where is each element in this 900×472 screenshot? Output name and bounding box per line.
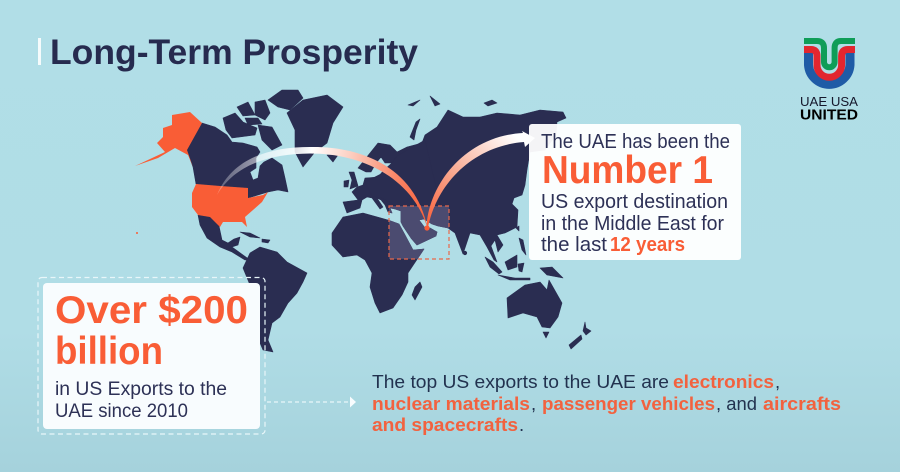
Iceland xyxy=(327,155,338,162)
Greenland xyxy=(287,95,343,167)
text block: top US exports: nuclear materials xyxy=(372,393,530,414)
Arctic Russia islands xyxy=(408,96,497,140)
arc: UAE to callout with arrow xyxy=(426,131,535,228)
text block: top US exports: . xyxy=(519,414,524,435)
Canada xyxy=(187,123,288,198)
callout: over $200 billion: in US Exports to the xyxy=(55,379,227,400)
British Isles xyxy=(344,172,358,189)
logo: UAE USA xyxy=(800,94,858,109)
text block: top US exports: , xyxy=(775,371,780,392)
text block: top US exports: passenger vehicles xyxy=(542,393,715,414)
South America xyxy=(243,247,307,352)
highlighted Middle East box xyxy=(388,205,450,260)
text block: top US exports: and spacecrafts xyxy=(372,414,518,435)
text block: top US exports: , and xyxy=(716,393,757,414)
text block: top US exports: electronics xyxy=(673,371,774,392)
Tasmania xyxy=(543,332,549,338)
Australia xyxy=(507,280,562,328)
dashed connector arrow xyxy=(267,396,356,408)
text block: top US exports: , xyxy=(531,393,536,414)
text block: top US exports: aircrafts xyxy=(763,393,841,414)
Arctic islands xyxy=(223,90,303,150)
callout: over $200 billion xyxy=(38,278,265,434)
logo: UNITED xyxy=(800,106,858,124)
Central Europe and Russia xyxy=(365,140,445,225)
world map xyxy=(135,90,591,352)
callout: number 1 export destination: the last xyxy=(541,234,607,256)
text block: top US exports xyxy=(372,371,841,435)
callout: number 1 export destination: 12 years xyxy=(610,234,685,256)
callout: number 1 export destination: in the Middle East for xyxy=(541,213,724,235)
callout: over $200 billion: Over $200 xyxy=(55,289,248,332)
United States highlighted xyxy=(135,112,430,234)
logo xyxy=(800,41,858,124)
title: Long-Term Prosperity xyxy=(50,33,419,72)
Africa xyxy=(332,213,424,313)
callout: over $200 billion: billion xyxy=(55,330,163,373)
Caribbean xyxy=(240,232,270,243)
callout: number 1 export destination: Number 1 xyxy=(542,149,713,192)
callout: number 1 export destination xyxy=(529,124,741,260)
New Zealand xyxy=(569,322,591,349)
Madagascar xyxy=(412,282,422,300)
Southeast Asia islands xyxy=(463,226,563,280)
arc: USA to UAE xyxy=(217,147,428,228)
text block: top US exports: The top US exports to the UAE are xyxy=(372,371,669,392)
callout: over $200 billion: UAE since 2010 xyxy=(55,401,188,422)
Mexico and Central America xyxy=(198,215,250,260)
callout: number 1 export destination: US export destination xyxy=(541,191,728,213)
callout: number 1 export destination: The UAE has been the xyxy=(541,131,730,153)
Eurasia xyxy=(343,110,566,262)
